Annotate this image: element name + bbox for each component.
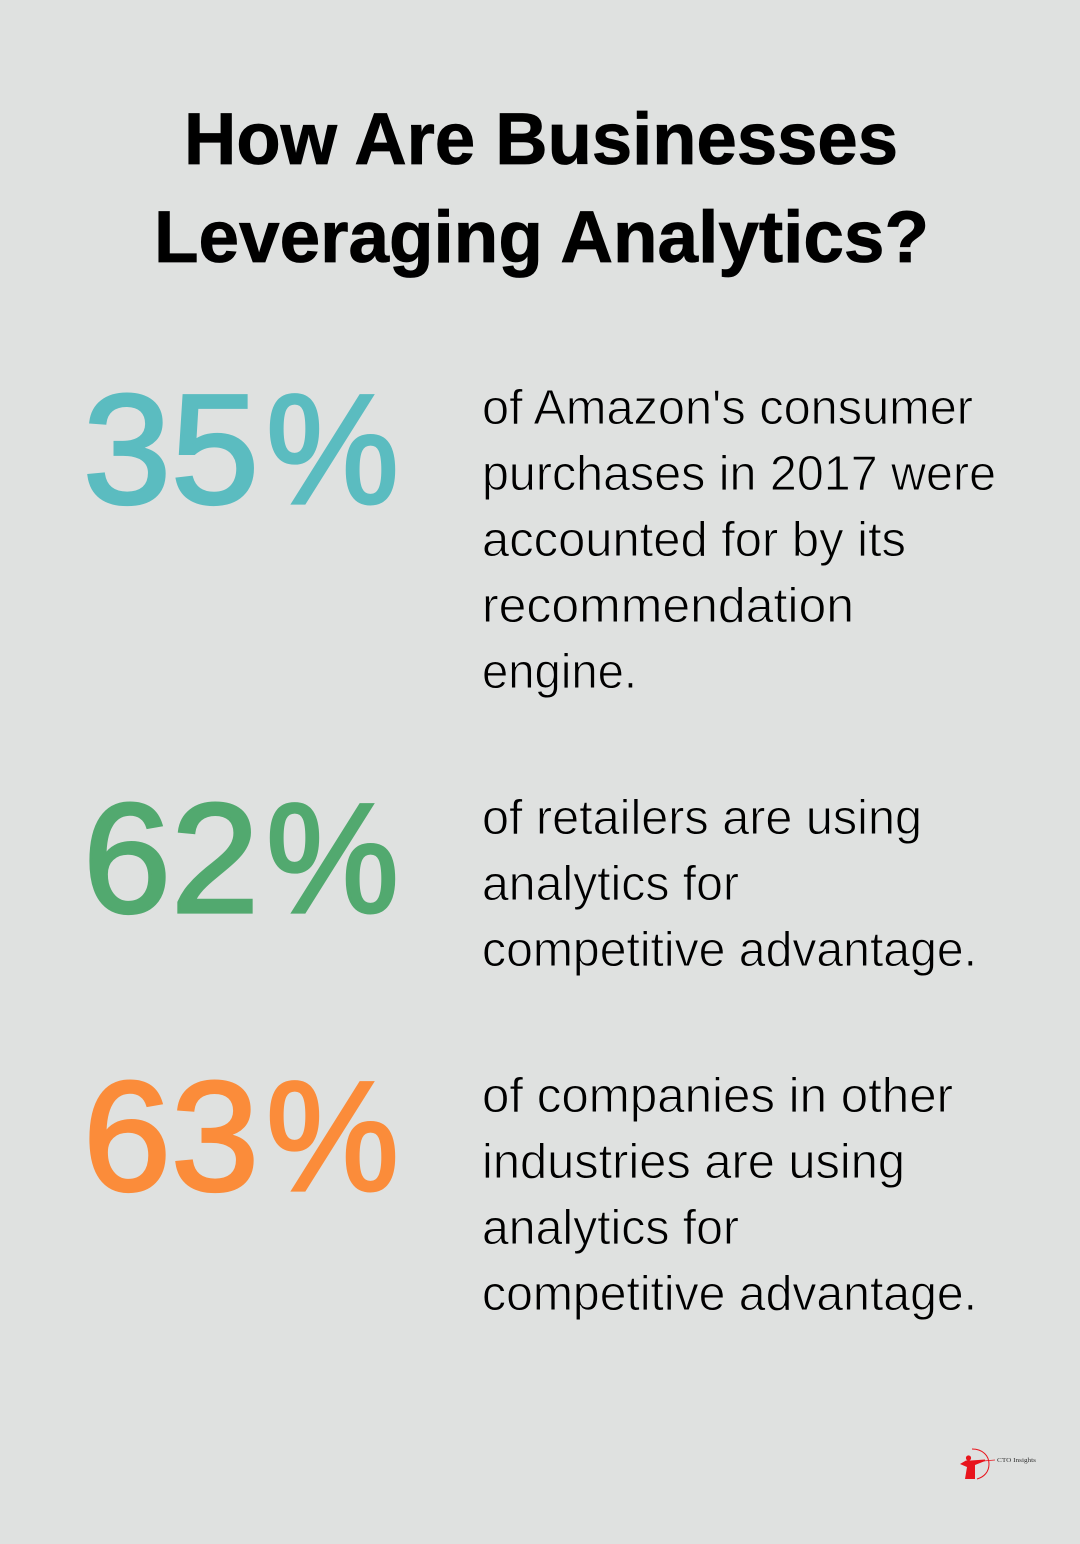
description: other industries: industries are using (482, 1135, 905, 1189)
description: Amazon recommendation engine (482, 381, 996, 699)
description: Amazon recommendation engine: purchases in 2017 were (482, 447, 996, 501)
description: other industries: of companies in other (482, 1069, 953, 1123)
title: How Are Businesses (184, 99, 898, 180)
description: retailers: of retailers are using (482, 791, 922, 845)
description: retailers: competitive advantage. (482, 923, 977, 977)
title: Leveraging Analytics? (154, 197, 929, 278)
logo: CTO Insights archer (960, 1449, 1037, 1479)
description: Amazon recommendation engine: of Amazon's consumer (482, 381, 973, 435)
description: Amazon recommendation engine: accounted for by its (482, 513, 906, 567)
icon: archer (960, 1449, 995, 1479)
number: 35%: 35 (83, 363, 259, 537)
stat: 35% (83, 363, 996, 699)
description: other industries (482, 1069, 977, 1321)
number: 63%: % (266, 1050, 399, 1224)
title (154, 99, 929, 278)
number: 62% (83, 772, 399, 946)
logo text: CTO Insights (997, 1458, 1037, 1464)
number: 35% (83, 363, 399, 537)
stat: 63% (83, 1050, 977, 1321)
stat: 62% (83, 772, 977, 977)
description: other industries: competitive advantage. (482, 1267, 977, 1321)
number: 62%: % (266, 772, 399, 946)
number: 63%: 63 (83, 1050, 259, 1224)
description: Amazon recommendation engine: recommendation (482, 579, 854, 633)
description: retailers (482, 791, 977, 977)
number: 62%: 62 (83, 772, 259, 946)
description: retailers: analytics for (482, 857, 739, 911)
number: 35%: % (266, 363, 399, 537)
description: other industries: analytics for (482, 1201, 739, 1255)
number: 63% (83, 1050, 399, 1224)
description: Amazon recommendation engine: engine. (482, 645, 637, 699)
